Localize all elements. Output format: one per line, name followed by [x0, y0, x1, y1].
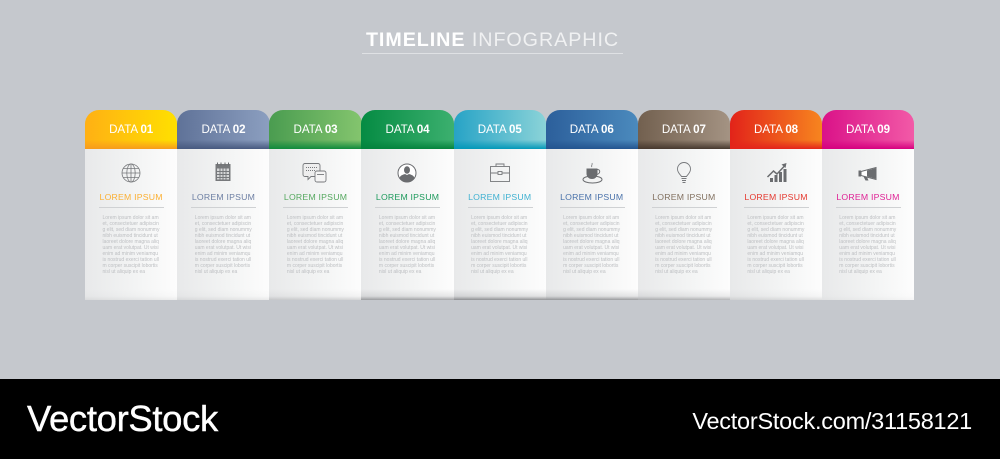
icon: megaphone — [858, 166, 876, 180]
header: data 05 — [454, 110, 546, 149]
body: data 05 — [454, 149, 546, 300]
heading: LOREM IPSUM — [100, 192, 163, 202]
text block: Lorem ipsum dolor sit am et, consectetuer adipiscin g elit, sed diam nonummy nibh euismod tincidunt ut laoreet dolore magna aliq uam erat volutpat. Ut wisi enim ad minim veniamqu is nostrud exerci tation ull m corper suscipit lobortis nisl ut aliquip ex ea — [563, 214, 620, 275]
header: data 08: DATA 08 — [754, 123, 798, 136]
icon: coffee cup — [582, 162, 602, 184]
icon: briefcase — [490, 164, 510, 182]
text block: Lorem ipsum dolor sit am et, consectetuer adipiscin g elit, sed diam nonummy nibh euismod tincidunt ut laoreet dolore magna aliq uam erat volutpat. Ut wisi enim ad minim veniamqu is nostrud exerci tation ull m corper suscipit lobortis nisl ut aliquip ex ea — [287, 214, 344, 275]
header: data 03 — [269, 110, 362, 149]
header: data 09 — [822, 110, 914, 149]
icon: chat bubbles — [302, 163, 326, 182]
heading: LOREM IPSUM — [560, 192, 623, 202]
body: data 02 — [177, 149, 270, 300]
panel: data 08 — [730, 110, 822, 300]
panel: data 07 — [638, 110, 730, 300]
body: data 09 — [822, 149, 914, 300]
heading: LOREM IPSUM — [744, 192, 808, 202]
body: data 01 — [85, 149, 177, 300]
heading: LOREM IPSUM — [192, 192, 255, 202]
heading: LOREM IPSUM — [284, 192, 347, 202]
header: data 04 — [361, 110, 454, 149]
panel: data 04 — [361, 110, 454, 300]
panel: data 06 — [546, 110, 638, 300]
heading: LOREM IPSUM — [376, 192, 439, 202]
header: data 05: DATA 05 — [478, 123, 522, 136]
heading: LOREM IPSUM — [468, 192, 531, 202]
footer logo: VectorStock — [27, 398, 218, 439]
text block: Lorem ipsum dolor sit am et, consectetuer adipiscin g elit, sed diam nonummy nibh euismod tincidunt ut laoreet dolore magna aliq uam erat volutpat. Ut wisi enim ad minim veniamqu is nostrud exerci tation ull m corper suscipit lobortis nisl ut aliquip ex ea — [655, 214, 712, 275]
header: data 06: DATA 06 — [570, 123, 614, 136]
header: data 09: DATA 09 — [846, 123, 890, 136]
title: TIMELINE INFOGRAPHIC — [366, 29, 619, 51]
body: data 04 — [361, 149, 454, 300]
header: data 07 — [638, 110, 730, 149]
icon: light bulb — [677, 162, 691, 183]
footer url: VectorStock.com/31158121 — [692, 408, 972, 434]
body: data 07 — [638, 149, 730, 300]
panel: data 03 — [269, 110, 362, 300]
heading: LOREM IPSUM — [836, 192, 900, 202]
body: data 03 — [269, 149, 362, 300]
header: data 07: DATA 07 — [662, 123, 706, 136]
body: data 08 — [730, 149, 822, 300]
header: data 04: DATA 04 — [386, 123, 430, 136]
icon: businessman — [398, 164, 416, 182]
text block: Lorem ipsum dolor sit am et, consectetuer adipiscin g elit, sed diam nonummy nibh euismod tincidunt ut laoreet dolore magna aliq uam erat volutpat. Ut wisi enim ad minim veniamqu is nostrud exerci tation ull m corper suscipit lobortis nisl ut aliquip ex ea — [195, 214, 252, 275]
text block: Lorem ipsum dolor sit am et, consectetuer adipiscin g elit, sed diam nonummy nibh euismod tincidunt ut laoreet dolore magna aliq uam erat volutpat. Ut wisi enim ad minim veniamqu is nostrud exerci tation ull m corper suscipit lobortis nisl ut aliquip ex ea — [471, 214, 528, 275]
text block: Lorem ipsum dolor sit am et, consectetuer adipiscin g elit, sed diam nonummy nibh euismod tincidunt ut laoreet dolore magna aliq uam erat volutpat. Ut wisi enim ad minim veniamqu is nostrud exerci tation ull m corper suscipit lobortis nisl ut aliquip ex ea — [102, 214, 159, 275]
icon: calendar — [216, 162, 230, 181]
header: data 01: DATA 01 — [109, 123, 153, 136]
icon: growth chart — [767, 163, 786, 182]
heading: LOREM IPSUM — [652, 192, 715, 202]
panel: data 05 — [454, 110, 546, 300]
header: data 01 — [85, 110, 177, 149]
header: data 06 — [546, 110, 638, 149]
text block: Lorem ipsum dolor sit am et, consectetuer adipiscin g elit, sed diam nonummy nibh euismod tincidunt ut laoreet dolore magna aliq uam erat volutpat. Ut wisi enim ad minim veniamqu is nostrud exerci tation ull m corper suscipit lobortis nisl ut aliquip ex ea — [839, 214, 896, 275]
header: data 02 — [177, 110, 270, 149]
header: data 02: DATA 02 — [201, 123, 245, 136]
footer band — [0, 379, 1000, 459]
header: data 03: DATA 03 — [294, 123, 338, 136]
text block: Lorem ipsum dolor sit am et, consectetuer adipiscin g elit, sed diam nonummy nibh euismod tincidunt ut laoreet dolore magna aliq uam erat volutpat. Ut wisi enim ad minim veniamqu is nostrud exerci tation ull m corper suscipit lobortis nisl ut aliquip ex ea — [747, 214, 804, 275]
header: data 08 — [730, 110, 822, 149]
body: data 06 — [546, 149, 638, 300]
text block: Lorem ipsum dolor sit am et, consectetuer adipiscin g elit, sed diam nonummy nibh euismod tincidunt ut laoreet dolore magna aliq uam erat volutpat. Ut wisi enim ad minim veniamqu is nostrud exerci tation ull m corper suscipit lobortis nisl ut aliquip ex ea — [379, 214, 436, 275]
panel: data 02 — [177, 110, 270, 300]
icon: globe — [122, 164, 140, 182]
panel: data 09 — [822, 110, 914, 300]
panel: data 01 — [85, 110, 177, 300]
